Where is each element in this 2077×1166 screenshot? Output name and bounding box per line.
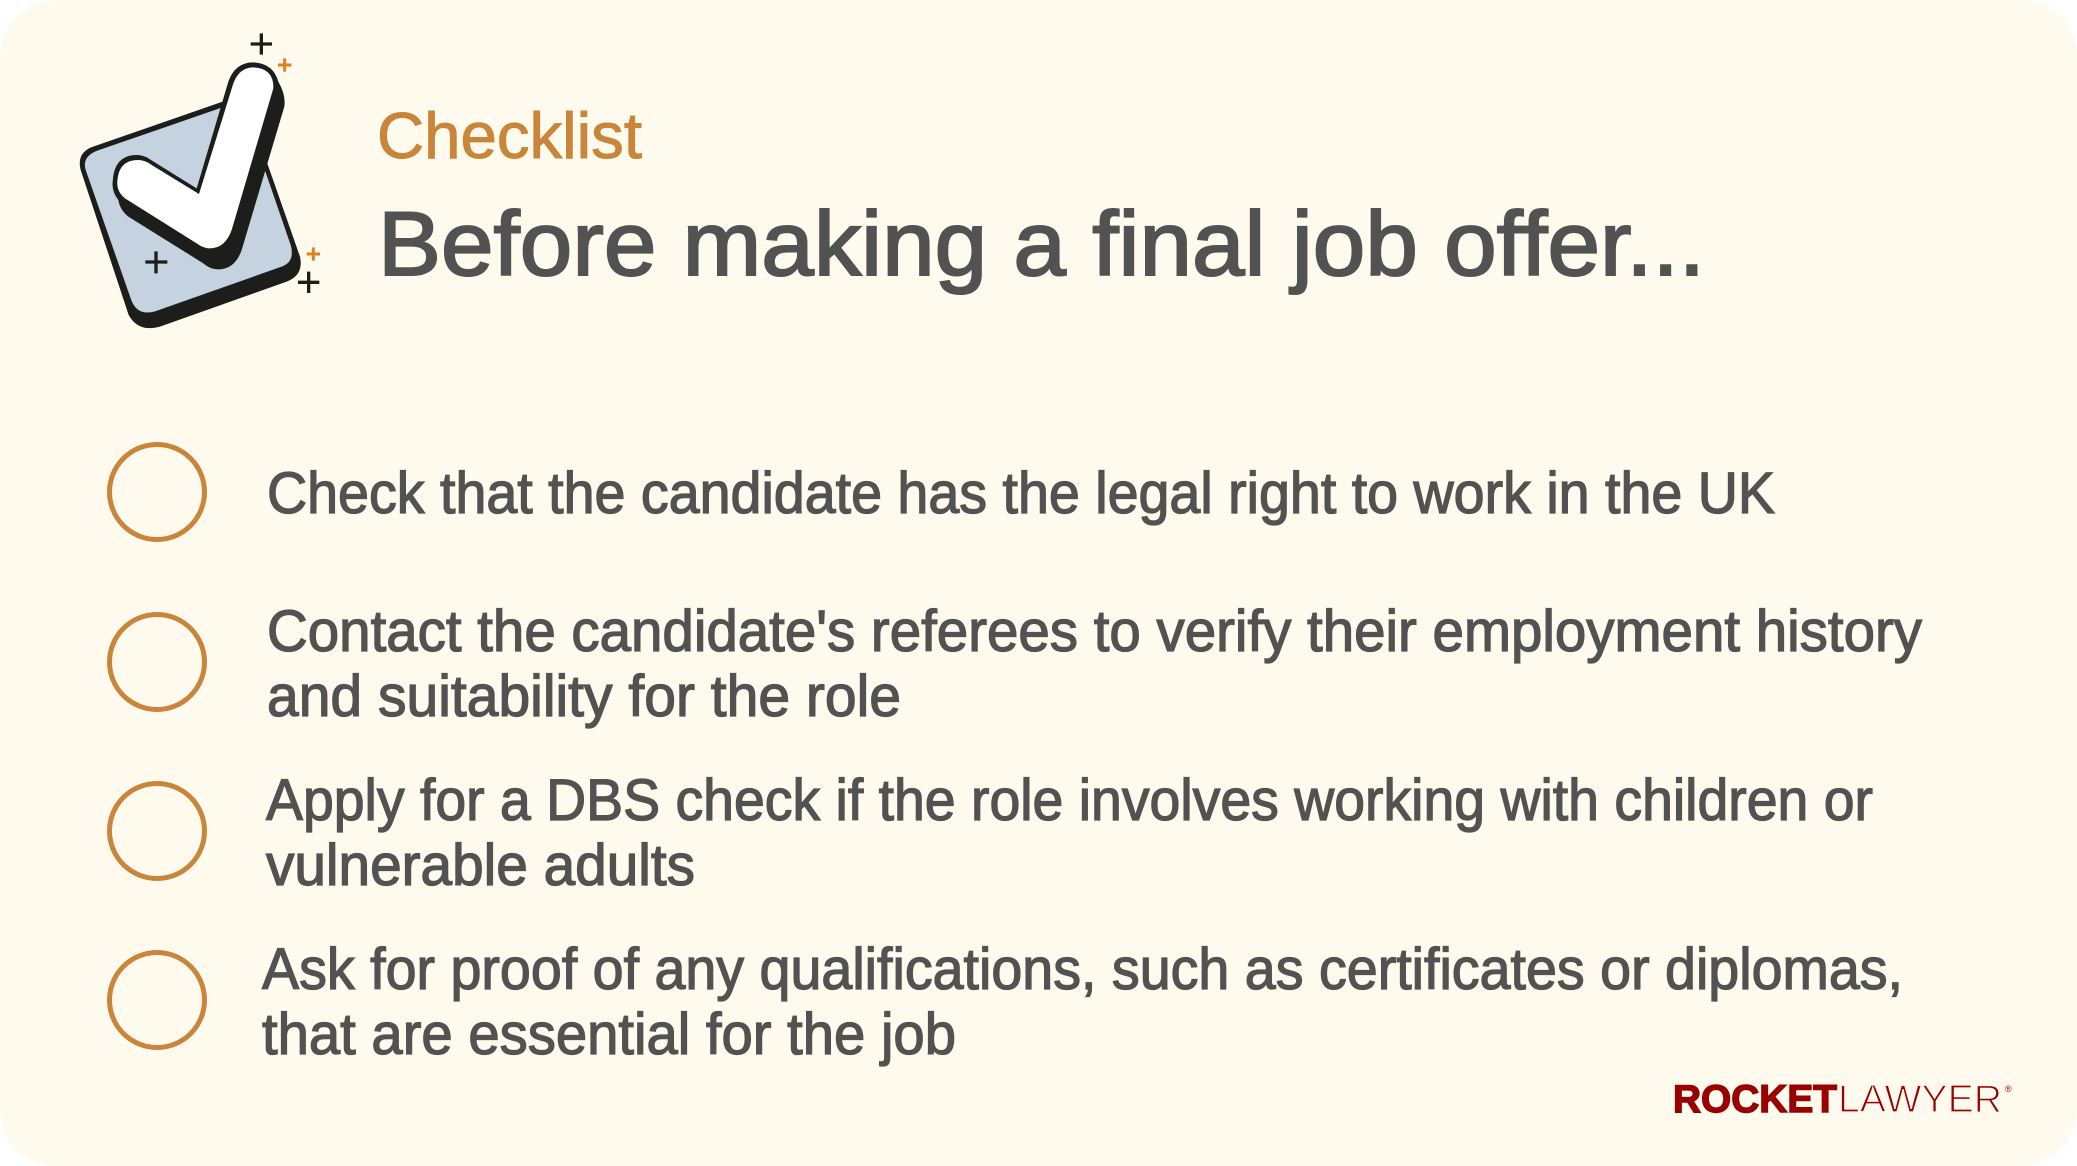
checklist item 2: [110, 599, 1922, 729]
checklist item 3: [110, 768, 1873, 898]
text: item 2: Contact the candidate's referees to verify their employment history: [267, 599, 1922, 664]
text: item 2: and suitability for the role: [267, 664, 901, 729]
text: item 4: [262, 937, 1903, 1067]
logo: Rocket Lawyer: ROCKET: [1673, 1078, 1837, 1121]
text: item 2: [267, 599, 1922, 729]
icon: sparkle plus signs: [145, 33, 320, 293]
icon: empty circle 2: [110, 614, 204, 710]
checklist item 1: [110, 444, 1775, 540]
icon: check mark outline and shadow: [113, 62, 285, 269]
text: item 4: that are essential for the job: [262, 1002, 956, 1067]
icon: tilted checkbox with check mark: [80, 33, 320, 328]
text: item 3: Apply for a DBS check if the role involves working with children or: [266, 768, 1873, 833]
logo: Rocket Lawyer: LAWYER: [1838, 1078, 2002, 1121]
text: item 1: Check that the candidate has the legal right to work in the UK: [267, 461, 1775, 526]
checklist item 4: [110, 937, 1903, 1067]
text: item 4: Ask for proof of any qualifications, such as certificates or diplomas,: [262, 937, 1903, 1002]
text: item 3: vulnerable adults: [266, 833, 695, 898]
icon: empty circle 3: [110, 784, 204, 878]
logo: Rocket Lawyer: ®: [2005, 1084, 2012, 1094]
icon: checkbox outline and shadow: [80, 95, 301, 328]
icon: checkbox blue face: [85, 102, 292, 313]
icon: check mark white face: [117, 67, 273, 248]
subheading: Checklist: [377, 99, 642, 172]
icon: empty circle 1: [110, 444, 204, 540]
text: item 3: [266, 768, 1873, 898]
icon: empty circle 4: [110, 952, 204, 1048]
logo: Rocket Lawyer: [1673, 1078, 2012, 1121]
title: Before making a final job offer...: [378, 194, 1705, 295]
